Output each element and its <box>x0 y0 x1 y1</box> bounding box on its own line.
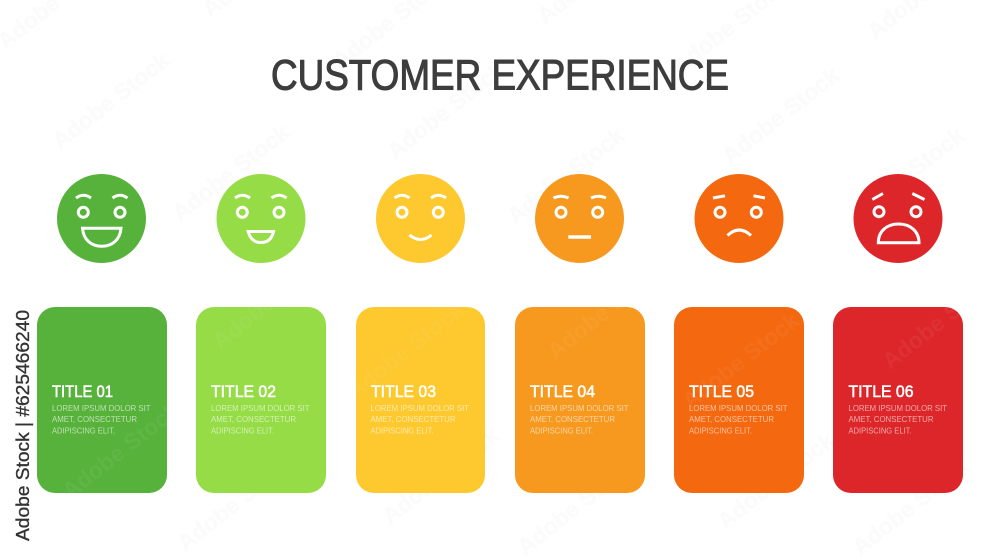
panel: title 04 <box>515 307 645 493</box>
panel: title 06: TITLE 06 <box>848 382 914 401</box>
panel: title 02: TITLE 02 <box>211 382 276 401</box>
panel: title 05: AMET, CONSECTETUR <box>689 414 774 424</box>
panel: title 01 <box>37 307 167 493</box>
panel: title 02: LOREM IPSUM DOLOR SIT <box>211 403 310 413</box>
panel: title 01: ADIPISCING ELIT. <box>52 426 115 436</box>
panel: title 06: ADIPISCING ELIT. <box>848 426 912 436</box>
panel: title 05: TITLE 05 <box>689 382 754 401</box>
text: Adobe Stock <box>502 122 629 229</box>
text: Adobe Stock <box>47 47 174 154</box>
panel: title 04: LOREM IPSUM DOLOR SIT <box>530 403 628 413</box>
panel: title 03: LOREM IPSUM DOLOR SIT <box>370 403 469 413</box>
text: Adobe Stock <box>677 307 804 414</box>
panel: title 03 <box>356 307 485 493</box>
panel: title 06: AMET, CONSECTETUR <box>848 414 934 424</box>
panel: title 06: LOREM IPSUM DOLOR SIT <box>848 403 947 413</box>
icon: happy face <box>216 174 306 263</box>
panel: title 05: ADIPISCING ELIT. <box>689 426 752 436</box>
panel: title 05: LOREM IPSUM DOLOR SIT <box>689 403 788 413</box>
icon: neutral face <box>535 174 624 263</box>
panel: title 03: ADIPISCING ELIT. <box>370 426 434 436</box>
text: Adobe Stock <box>842 122 969 229</box>
panel: title 04: ADIPISCING ELIT. <box>530 426 593 436</box>
stock credit: Adobe Stock | #625466240 <box>13 310 33 541</box>
panel: title 05 <box>674 307 804 493</box>
icon: very happy face <box>57 174 146 263</box>
panel: title 01: AMET, CONSECTETUR <box>52 414 137 424</box>
panel: title 06 <box>833 307 963 493</box>
panel: title 02: AMET, CONSECTETUR <box>211 414 296 424</box>
text: Adobe Stock <box>172 449 299 556</box>
panel: title 03: TITLE 03 <box>371 382 436 401</box>
icon: unhappy face <box>694 174 784 263</box>
text: Adobe Stock <box>712 427 839 534</box>
panel: title 02: ADIPISCING ELIT. <box>211 426 274 436</box>
text: Adobe Stock <box>542 257 669 364</box>
text: Adobe Stock <box>207 247 334 354</box>
text: Adobe Stock <box>342 297 469 404</box>
panel: title 03: AMET, CONSECTETUR <box>370 414 456 424</box>
panel: title 02 <box>196 307 326 493</box>
icon: slightly happy face <box>376 174 465 263</box>
text: Adobe Stock <box>167 119 294 226</box>
panel: title 04: TITLE 04 <box>530 382 595 401</box>
text: Adobe Stock <box>377 422 504 529</box>
panel: title 01: LOREM IPSUM DOLOR SIT <box>52 403 150 413</box>
title: CUSTOMER EXPERIENCE <box>271 52 729 100</box>
text: Adobe Stock <box>382 57 509 164</box>
panel: title 04: AMET, CONSECTETUR <box>530 414 615 424</box>
text: Adobe Stock <box>717 62 844 169</box>
text: Adobe Stock <box>57 397 184 504</box>
icon: very unhappy face <box>854 174 942 263</box>
panel: title 01: TITLE 01 <box>52 382 113 401</box>
